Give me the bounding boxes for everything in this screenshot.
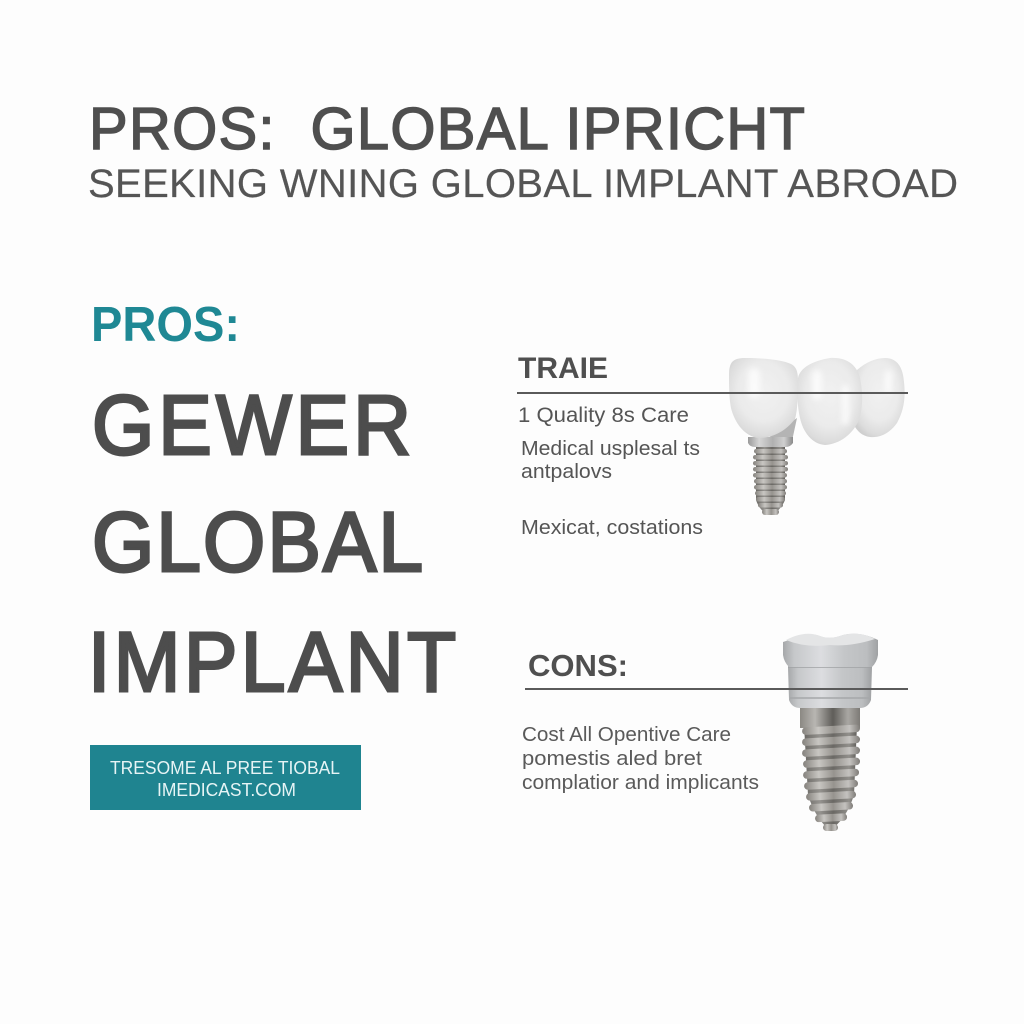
list text: 1 Quality 8s Care bbox=[518, 403, 689, 427]
teal call-to-action box: IMEDICAST.COM bbox=[157, 779, 296, 800]
first tooth bbox=[729, 358, 798, 438]
divider line bbox=[525, 688, 908, 690]
list text bbox=[518, 403, 703, 539]
implant screw of bridge bbox=[748, 418, 797, 515]
icon: titanium implant bbox=[783, 634, 878, 831]
implant threaded body bbox=[800, 708, 860, 831]
teal call-to-action box bbox=[90, 745, 361, 810]
pros heading: PROS: bbox=[91, 298, 240, 352]
heading: TRAIE: TRAIE bbox=[518, 352, 608, 385]
list text: complatior and implicants bbox=[522, 771, 759, 794]
list text: antpalovs bbox=[521, 460, 612, 483]
large headline: GLOBAL bbox=[92, 495, 423, 590]
implant head bbox=[783, 634, 878, 667]
list text: Mexicat, costations bbox=[521, 516, 703, 539]
panel: upper text column bbox=[517, 352, 908, 539]
heading: CONS: CONS: bbox=[528, 648, 628, 683]
teal call-to-action box: TRESOME AL PREE TIOBAL bbox=[110, 757, 340, 778]
title: PROS: GLOBAL IPRICHT bbox=[89, 96, 805, 162]
subtitle: SEEKING WNING GLOBAL IMPLANT ABROAD bbox=[88, 162, 958, 206]
large headline bbox=[88, 378, 456, 710]
implant collar bbox=[788, 667, 872, 708]
panel: lower text column bbox=[522, 648, 908, 794]
list text: pomestis aled bret bbox=[522, 747, 702, 770]
divider line bbox=[517, 392, 908, 394]
large headline: IMPLANT bbox=[88, 615, 456, 710]
third tooth bbox=[854, 358, 905, 437]
icon: dental bridge on implant bbox=[729, 358, 905, 515]
large headline: GEWER bbox=[92, 378, 411, 473]
list text: Cost All Opentive Care bbox=[522, 723, 731, 746]
list text bbox=[522, 723, 759, 794]
list text: Medical usplesal ts bbox=[521, 437, 700, 460]
second tooth bbox=[797, 358, 862, 445]
